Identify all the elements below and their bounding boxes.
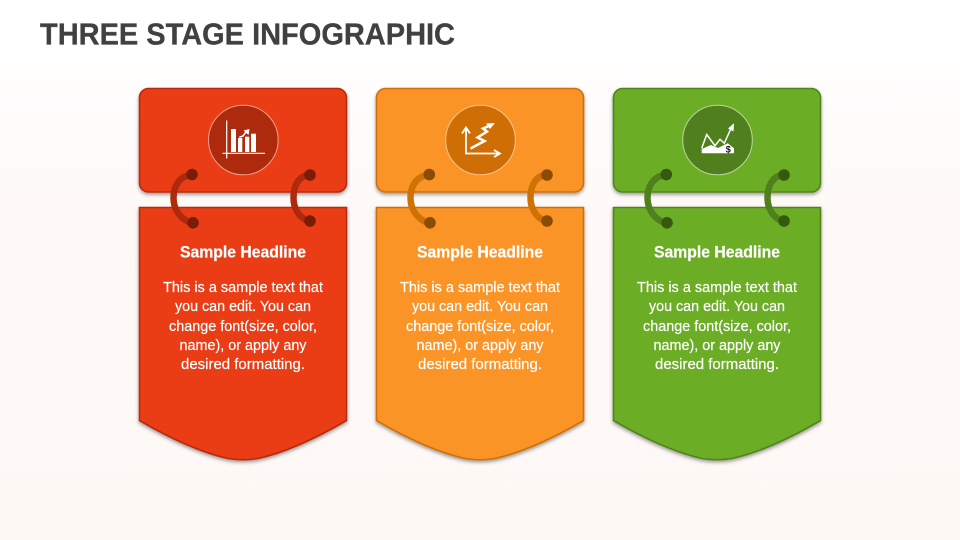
panel: green stage [614,88,820,460]
red text block: desired formatting. [181,356,305,373]
icon: bar chart [208,105,278,175]
red text block: This is a sample text that [163,279,324,296]
icon: area chart with dollar sign: $ [726,144,731,154]
orange text block: you can edit. You can [412,298,548,315]
rings: right [530,169,553,227]
red text block: name), or apply any [180,337,307,354]
green text block: name), or apply any [654,337,781,354]
panel: red stage [140,88,346,460]
orange text block: change font(size, color, [406,318,554,335]
red text block: Sample Headline [180,244,306,262]
icon: rising zigzag chart [446,105,515,175]
red text block: change font(size, color, [169,318,317,335]
orange bottom tag [376,208,584,460]
green top card [614,88,820,192]
green text block [637,244,798,373]
green text block: change font(size, color, [643,318,791,335]
orange text block: Sample Headline [417,244,543,262]
orange text block: This is a sample text that [400,279,561,296]
rings: left [174,169,199,229]
orange text block [400,244,561,373]
red bottom tag [140,208,346,460]
panel: orange stage [376,88,584,460]
orange text block: name), or apply any [416,337,544,354]
green text block: Sample Headline [654,244,780,262]
red text block [163,244,324,373]
icon: area chart with dollar sign [683,105,752,175]
title: THREE STAGE INFOGRAPHIC [40,18,455,52]
green text block: This is a sample text that [637,279,798,296]
rings: right [768,169,790,227]
rings: left [648,169,673,229]
red top card [140,88,346,192]
red text block: you can edit. You can [175,298,311,315]
orange top card [376,88,584,192]
rings: right [294,169,316,227]
orange text block: desired formatting. [418,356,542,373]
rings: left [410,169,436,229]
green bottom tag [614,208,820,460]
green text block: you can edit. You can [649,298,785,315]
green text block: desired formatting. [655,356,779,373]
